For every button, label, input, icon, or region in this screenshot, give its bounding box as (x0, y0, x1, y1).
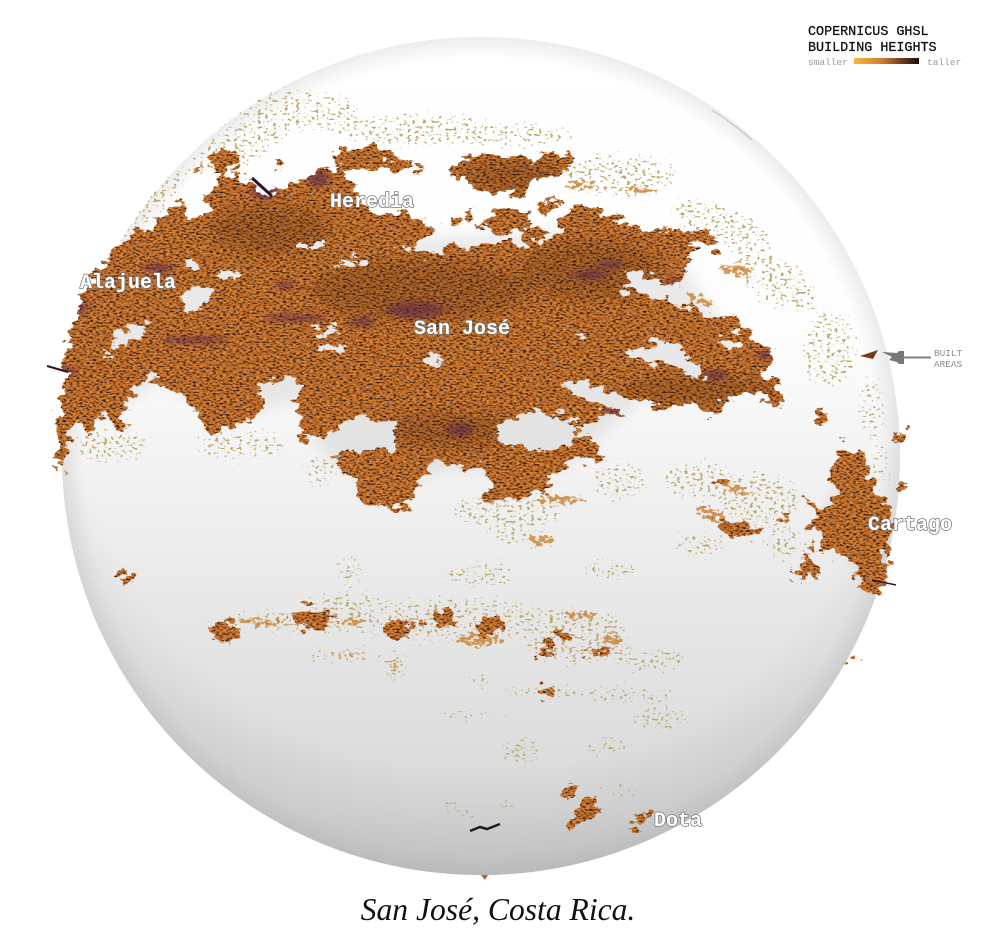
spike buildings (47, 178, 896, 585)
legend colour ramp (854, 58, 919, 64)
legend (808, 25, 961, 68)
annotation: built areas pointer (882, 348, 963, 370)
label: Alajuela: Alajuela (80, 272, 176, 295)
tall buildings, purple patches (53, 169, 775, 437)
legend title: COPERNICUS GHSL (808, 25, 929, 40)
label: Heredia: Heredia (330, 191, 414, 214)
dark ridge mark (470, 824, 500, 831)
legend smaller label: smaller (808, 57, 848, 68)
title: San José, Costa Rica. (361, 892, 635, 927)
darker core tone (210, 159, 780, 448)
annotation text: BUILT (934, 348, 963, 359)
top right limb arc (712, 110, 752, 140)
legend taller label: taller (927, 57, 961, 68)
annotation text: AREAS (934, 359, 963, 370)
label: Dota: Dota (654, 810, 702, 833)
legend title: BUILDING HEIGHTS (808, 41, 937, 56)
label: San José: San José (414, 318, 510, 341)
contact shadow of built areas (90, 190, 885, 580)
urban area: San José, Heredia and Alajuela (40, 135, 800, 515)
label: Cartago: Cartago (868, 514, 952, 537)
icon: pointing hand (882, 351, 904, 364)
clusters east of San José (702, 478, 790, 542)
bottom spike (481, 875, 488, 880)
isolated settlement near sphere edge (860, 350, 878, 359)
small orange settlements (230, 179, 756, 673)
scattered faint settlements (70, 74, 890, 830)
globe sphere (62, 37, 900, 875)
southern settlements (105, 565, 865, 840)
urban area: Cartago (800, 405, 915, 605)
